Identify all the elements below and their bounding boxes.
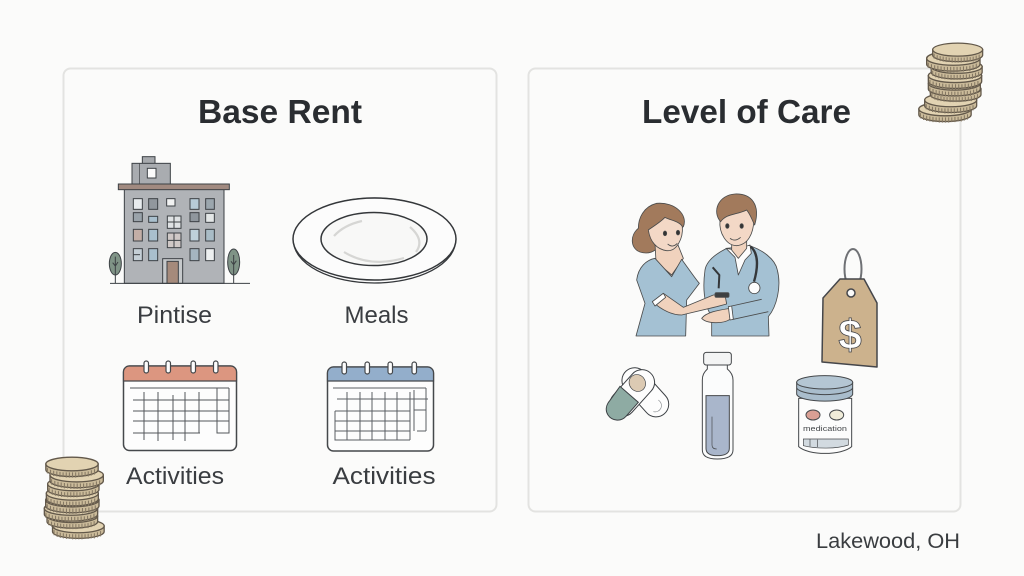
- icon: medication jar: [797, 376, 853, 453]
- icon: coin stack bottom left: [44, 457, 104, 539]
- icon: coin stack top right: [919, 43, 983, 123]
- icon: price tag: $: [838, 311, 862, 358]
- doctor: [702, 194, 779, 336]
- icon: apartment building: [109, 157, 250, 283]
- heading: level of care: Level of Care: [642, 94, 851, 131]
- icon: orange calendar: [124, 361, 236, 450]
- icon: price tag: [822, 249, 877, 367]
- icon: vial: [702, 352, 733, 459]
- icon: nurse and doctor: [632, 194, 779, 336]
- panel: base rent: [64, 68, 496, 512]
- label: Activities right: Activities: [332, 463, 436, 490]
- nurse arm holding device: [652, 293, 729, 315]
- icon: capsules: [605, 363, 674, 422]
- label: Meals: Meals: [344, 302, 408, 329]
- nurse: [632, 203, 699, 336]
- location label: Lakewood, OH: [816, 529, 960, 553]
- icon: medication jar: medication: [803, 426, 847, 433]
- label: Pintise: Pintise: [137, 302, 212, 329]
- heading: base rent: Base Rent: [198, 94, 362, 131]
- panel: level of care: [528, 68, 960, 512]
- icon: blue calendar: [328, 362, 434, 451]
- label: Activities left: Activities: [126, 463, 224, 490]
- icon: dinner plate: [293, 198, 456, 283]
